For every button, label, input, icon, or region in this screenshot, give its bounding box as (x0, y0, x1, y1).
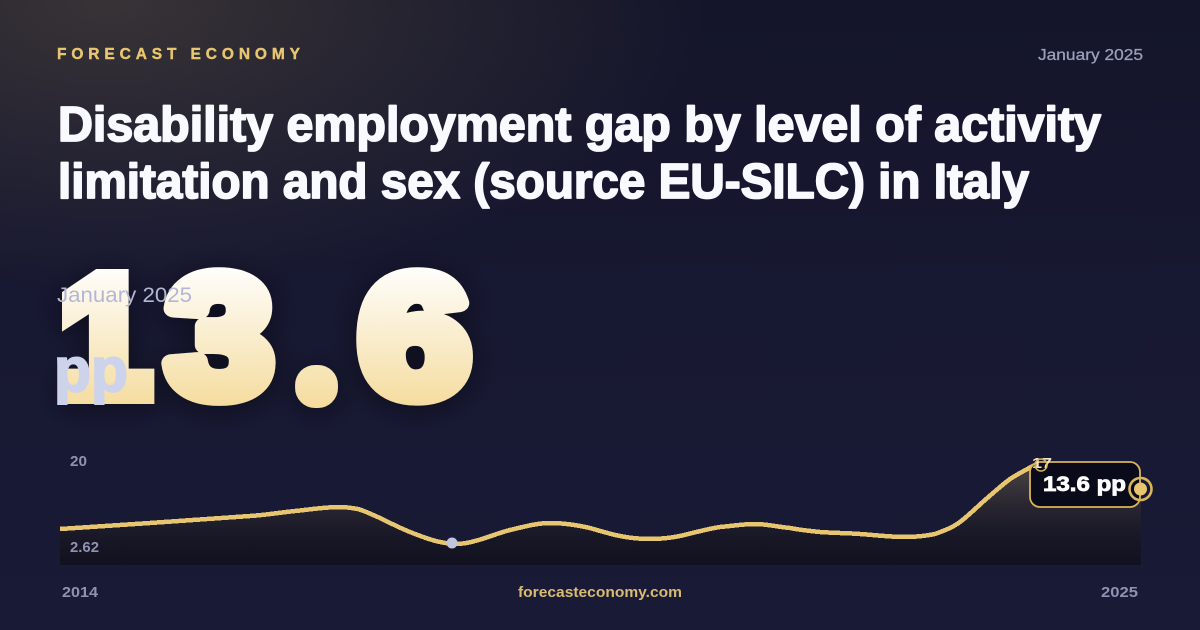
headline value: 13.6: 1 (60, 242, 150, 432)
value callout: 13.6 pp (1043, 473, 1126, 496)
area fill (60, 463, 1141, 565)
minimum marker (446, 538, 458, 548)
title (58, 98, 1101, 209)
title: limitation and sex (source EU-SILC) in Italy (58, 155, 1029, 209)
axis label: max: 20 (70, 454, 87, 470)
date: top right: January 2025 (1038, 47, 1143, 64)
footer url: forecasteconomy.com (518, 585, 682, 601)
value callout (1030, 462, 1140, 507)
x axis start year: 2014 (62, 585, 98, 601)
headline value: 13.6 (60, 242, 470, 432)
axis label: min: 2.62 (70, 540, 99, 556)
headline date: January 2025 (57, 284, 192, 307)
headline value: 13.6: 6 (360, 242, 470, 432)
eyebrow: brand label: FORECAST ECONOMY (57, 46, 301, 63)
area chart (60, 454, 1152, 565)
headline unit: pp: pp (54, 336, 128, 405)
headline value: 13.6: 3 (167, 242, 272, 432)
latest point marker (1130, 478, 1152, 500)
title: Disability employment gap by level of activity (58, 98, 1101, 152)
headline value: 13.6: . (314, 371, 319, 393)
trend line (60, 465, 1035, 544)
peak label: 17 (1032, 455, 1052, 472)
x axis end year: 2025 (1101, 585, 1138, 601)
